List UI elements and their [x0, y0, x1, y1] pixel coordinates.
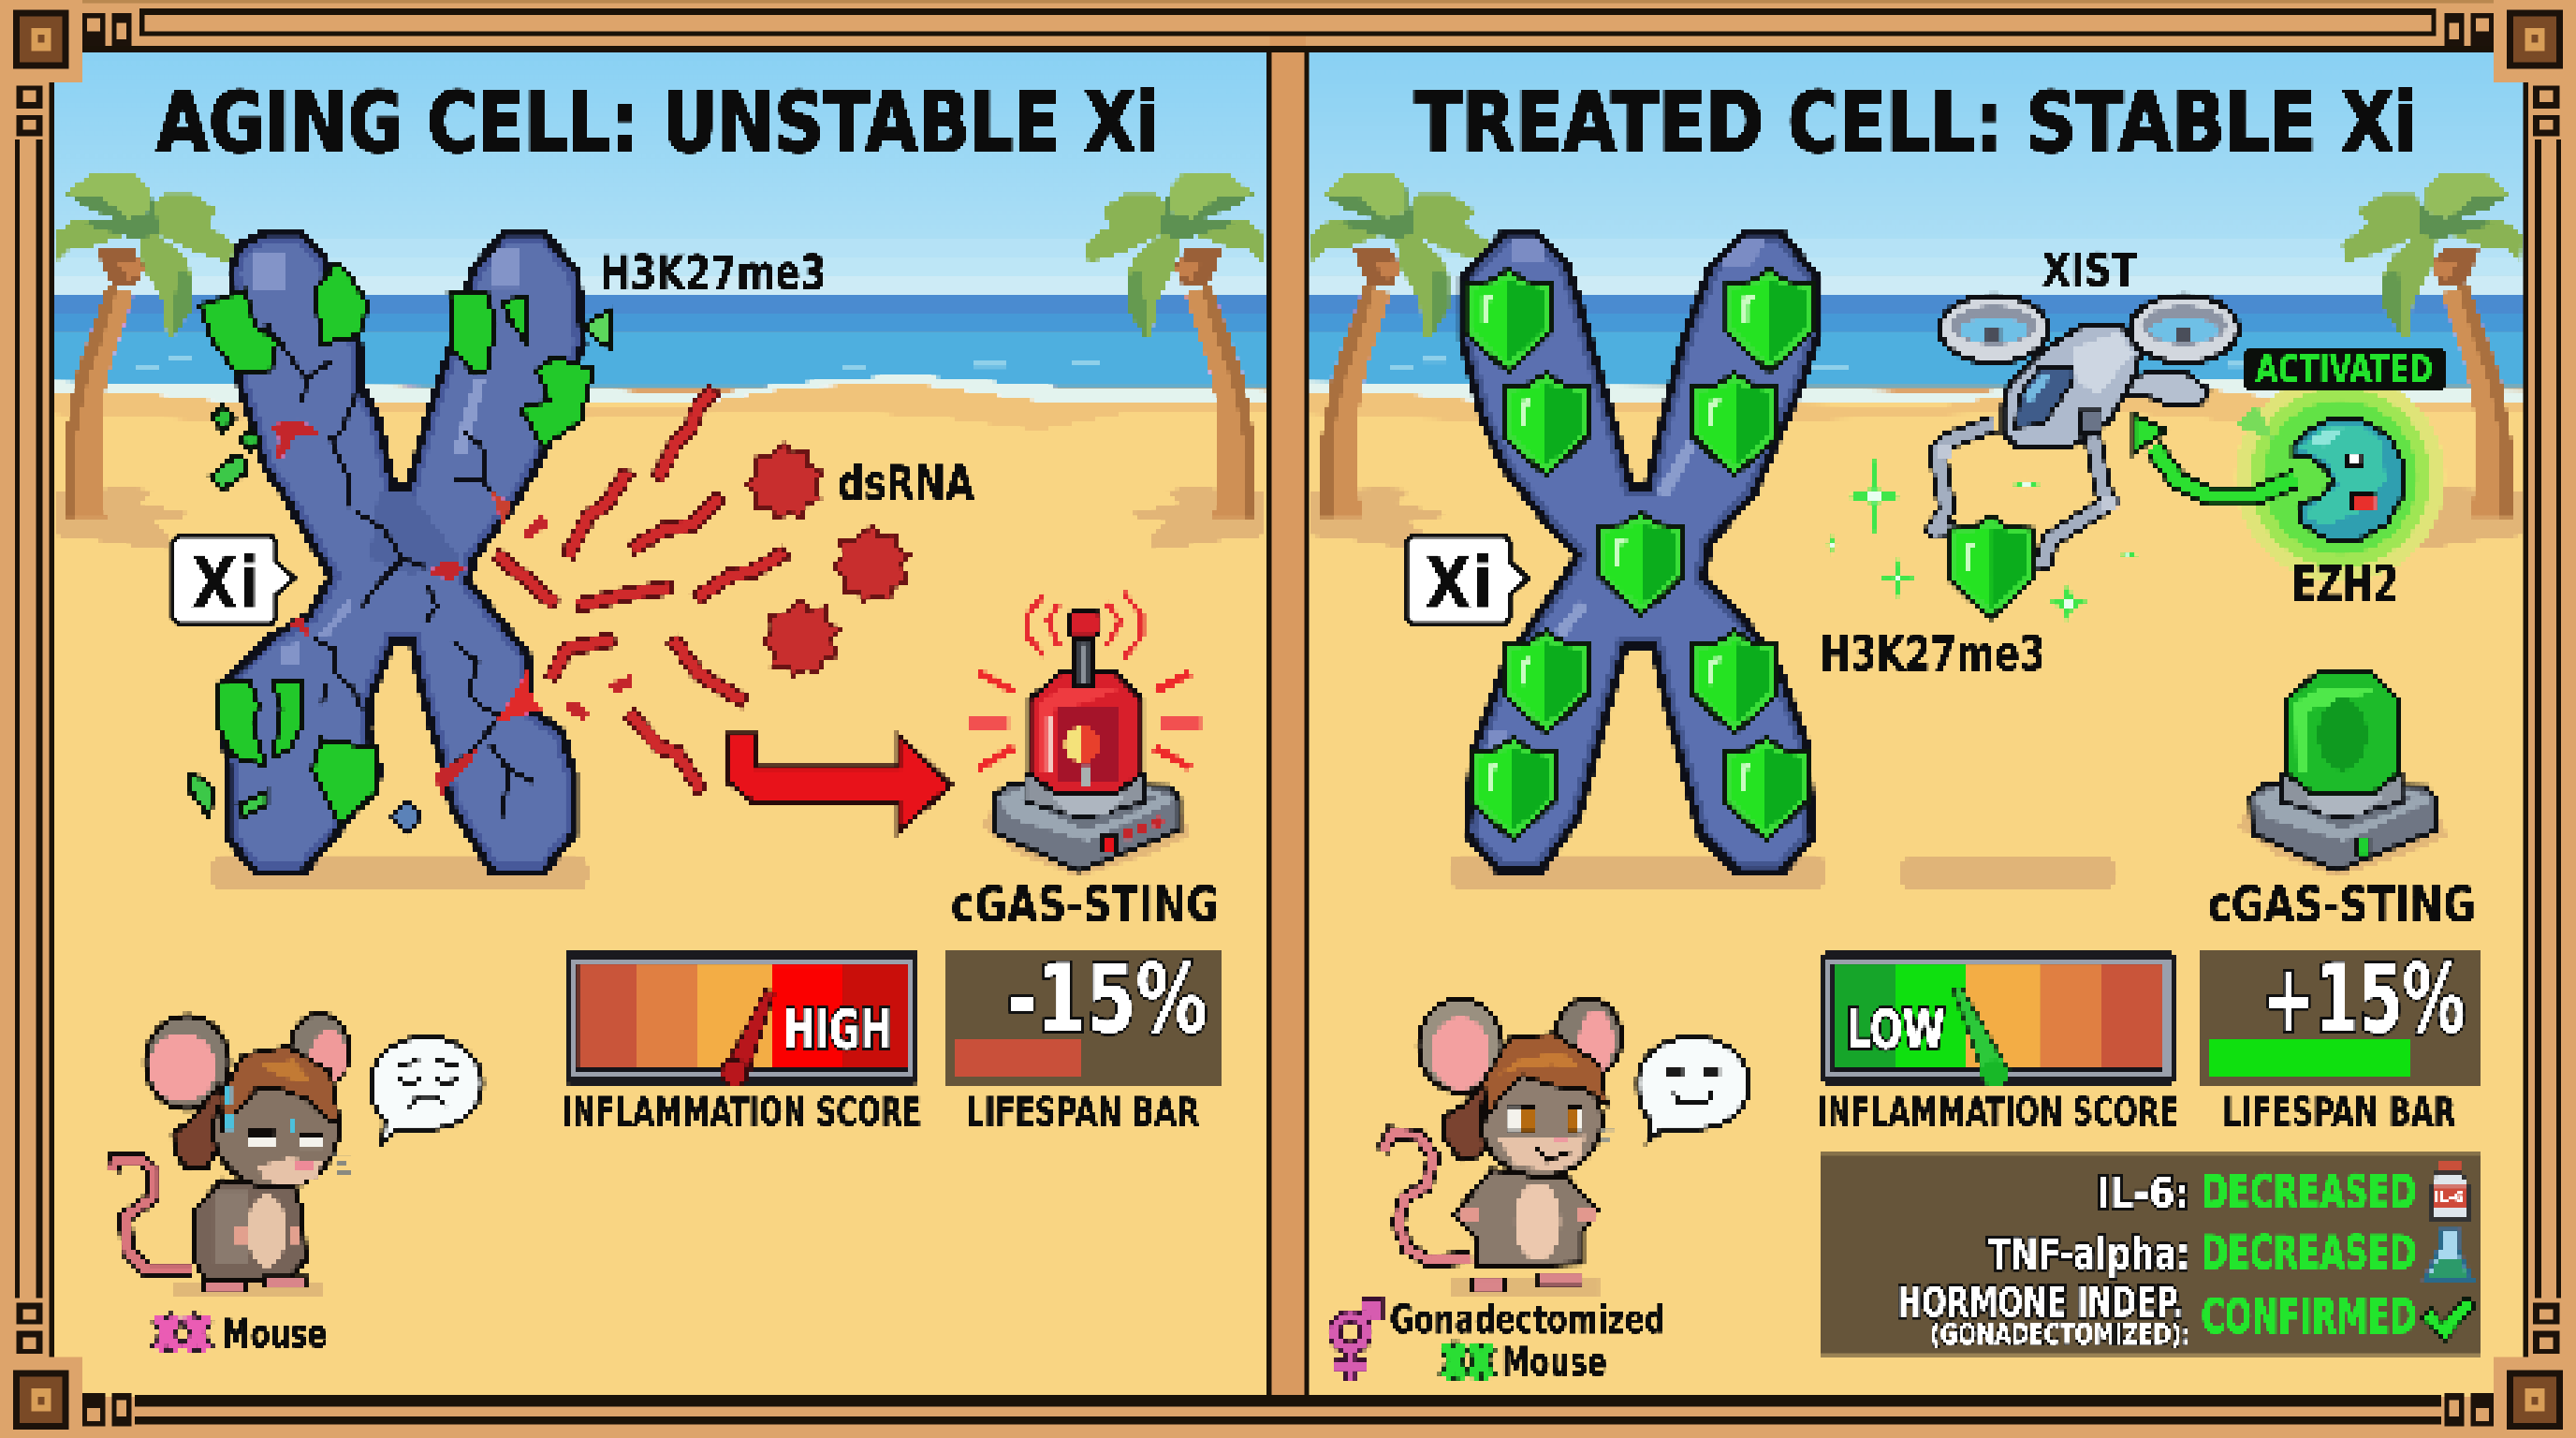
- icon: left mouse: [112, 1014, 350, 1299]
- label: XIST: XIST: [2042, 242, 2138, 297]
- icon: check mark: [2422, 1297, 2476, 1341]
- panel: biomarkers: [1821, 1153, 2481, 1356]
- arrow: activation curve: [2134, 415, 2296, 496]
- label: H3K27me3 left: H3K27me3: [600, 246, 827, 301]
- callout: Xi right: Xi: [1425, 541, 1493, 625]
- panel: treated cell background: [1303, 46, 2528, 1405]
- label: XX mouse right: Mouse: [1501, 1339, 1606, 1385]
- label: cGAS-STING left: cGAS-STING: [951, 877, 1219, 934]
- icon: intact Xi chromosome: [1449, 232, 2117, 890]
- icon: happy thought bubble: [1638, 1036, 1749, 1142]
- text: hormone row: [1897, 1279, 2417, 1352]
- icon: XX pink mark: [157, 1316, 207, 1351]
- text: TNF-alpha row: TNF-alpha:: [1988, 1229, 2189, 1279]
- text: hormone row: CONFIRMED: [2202, 1289, 2417, 1344]
- text: TNF-alpha row: [1988, 1225, 2417, 1280]
- icon: dsRNA fragments: [501, 394, 781, 785]
- icon: sad thought bubble: [372, 1036, 482, 1142]
- icon: XIST drone with shield: [1935, 296, 2238, 618]
- label: bottle tag: IL-6: [2435, 1189, 2465, 1207]
- value: plus 15 percent: +15%: [2262, 945, 2466, 1055]
- icon: green alarm: [2237, 672, 2448, 877]
- label: EZH2: EZH2: [2291, 554, 2398, 613]
- label: XX mouse left: Mouse: [222, 1311, 327, 1357]
- value: minus 15 percent: -15%: [1007, 945, 1208, 1055]
- icon: left panel palm tree left: [54, 171, 234, 550]
- label: HIGH: HIGH: [783, 998, 892, 1062]
- icon: gender symbol: [1335, 1304, 1377, 1380]
- label: inflammation score left: INFLAMMATION SCORE: [562, 1089, 922, 1135]
- text: hormone row: (GONADECTOMIZED):: [1930, 1319, 2189, 1352]
- icon: EZH2 enzyme: [2235, 373, 2445, 582]
- label: gonadectomized: Gonadectomized: [1390, 1296, 1666, 1342]
- label: lifespan bar right: LIFESPAN BAR: [2223, 1089, 2456, 1135]
- text: IL-6 row: [2096, 1165, 2417, 1219]
- icon: damaged Xi chromosome: [189, 232, 610, 890]
- icon: red alarm: [968, 594, 1201, 877]
- callout: Xi left: [172, 536, 294, 625]
- label: ACTIVATED: ACTIVATED: [2256, 347, 2433, 391]
- icon: left panel palm tree right: [1085, 171, 1265, 550]
- label: LOW: LOW: [1847, 998, 1945, 1062]
- callout: Xi left: Xi: [191, 541, 259, 625]
- panel: right gauge: [1822, 951, 2175, 1086]
- arrow: to cGAS-STING alarm: [726, 734, 951, 831]
- icon: IL-6 bottle: [2431, 1162, 2469, 1219]
- label: dsRNA: dsRNA: [838, 457, 974, 512]
- icon: sparkles: [1822, 457, 2139, 633]
- icon: virus particles: [748, 444, 910, 675]
- panel: left gauge: [565, 951, 918, 1086]
- callout: Xi right: [1406, 536, 1528, 625]
- label: inflammation score right: INFLAMMATION SCORE: [1817, 1089, 2178, 1135]
- panel: aging cell background: [46, 46, 1271, 1405]
- icon: TNF flask: [2424, 1230, 2472, 1280]
- text: TNF-alpha row: DECREASED: [2202, 1225, 2417, 1280]
- icon: right panel palm tree left: [1310, 171, 1491, 550]
- icon: XX green mark: [1445, 1344, 1490, 1378]
- title: aging cell: AGING CELL: UNSTABLE Xi: [156, 74, 1160, 171]
- label: H3K27me3 right: H3K27me3: [1821, 627, 2045, 682]
- label: lifespan bar left: LIFESPAN BAR: [966, 1089, 1199, 1135]
- icon: right mouse: [1383, 998, 1621, 1298]
- text: IL-6 row: IL-6:: [2096, 1168, 2189, 1218]
- label: cGAS-STING right: cGAS-STING: [2208, 877, 2476, 934]
- panel: left lifespan bar: [944, 949, 1222, 1084]
- text: hormone row: HORMONE INDEP.: [1897, 1279, 2183, 1327]
- text: IL-6 row: DECREASED: [2202, 1165, 2417, 1219]
- icon: right panel palm tree right: [2342, 171, 2522, 550]
- panel: right lifespan bar: [2202, 949, 2479, 1084]
